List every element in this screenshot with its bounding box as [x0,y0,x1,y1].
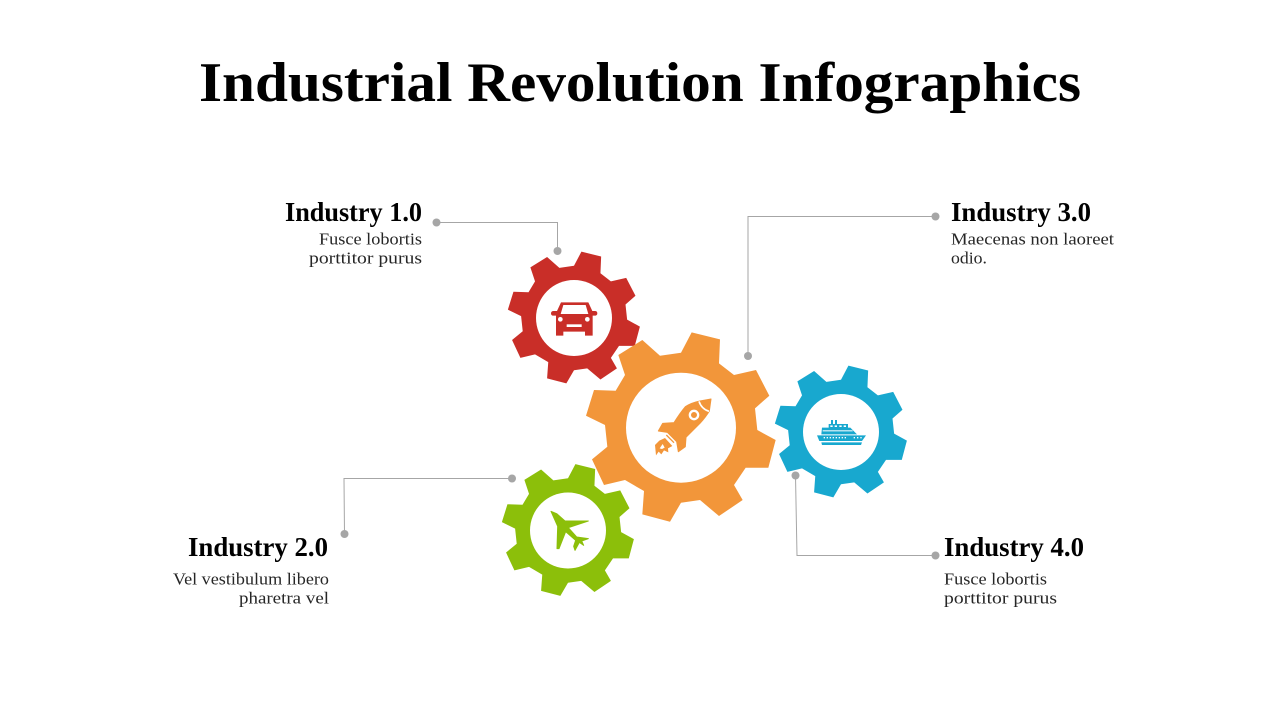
gear: blue, Industry 4.0 [775,366,907,497]
label: Industry 2.0 [173,532,329,608]
heading: Industry 2.0 [188,532,328,562]
description: Fusce lobortis [319,230,422,248]
description: Fusce lobortis [944,570,1047,588]
description [309,230,422,268]
icon: ship [817,420,866,445]
description: Maecenas non laoreet [951,230,1114,248]
heading: Industry 3.0 [951,197,1091,227]
description: Vel vestibulum libero [173,570,329,588]
description: pharetra vel [239,588,329,608]
heading: Industry 4.0 [944,532,1084,562]
description: odio. [951,248,987,268]
connector: Industry 4.0 [792,472,940,560]
description [951,230,1114,268]
connector: Industry 3.0 [744,212,940,360]
title: Industrial Revolution Infographics [199,52,1081,114]
label: Industry 4.0 [944,532,1084,608]
icon: airplane [551,511,588,550]
gear: red, Industry 1.0 [508,252,640,383]
connector: Industry 1.0 [432,218,562,255]
description: porttitor purus [944,588,1057,608]
label: Industry 1.0 [285,197,422,268]
connector: Industry 2.0 [340,474,516,538]
description [173,570,329,608]
description: porttitor purus [309,248,422,268]
icon: car [551,302,597,336]
label: Industry 3.0 [951,197,1114,268]
icon: rocket [655,399,711,455]
description [944,570,1057,608]
gear: orange, centre [586,332,776,522]
gear: green, Industry 2.0 [502,464,634,596]
heading: Industry 1.0 [285,197,422,227]
